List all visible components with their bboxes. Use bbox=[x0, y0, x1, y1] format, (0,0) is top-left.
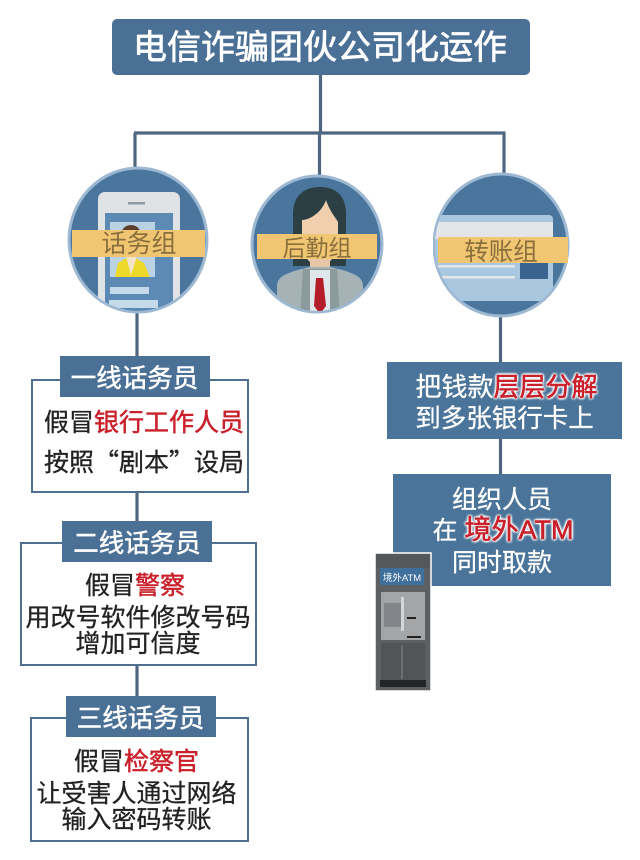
panel: 组织人员: 在 境外ATM bbox=[433, 515, 573, 545]
text: 二线话务员 description bbox=[25, 572, 250, 658]
icon: 后勤组 woman circle bbox=[250, 174, 384, 314]
icon: ATM machine bbox=[376, 552, 432, 690]
panel: 组织人员 bbox=[393, 474, 611, 586]
panel: 二线话务员 bbox=[20, 542, 257, 666]
icon: 转账组 bank card circle: 转账组 bbox=[464, 238, 538, 266]
label: 二线话务员 bbox=[62, 521, 212, 562]
text: 三线话务员 description: 假冒检察官 bbox=[74, 748, 199, 776]
text: 一线话务员 description bbox=[44, 408, 244, 478]
icon: ATM machine: 境外ATM bbox=[383, 572, 421, 584]
panel: 把钱款层层分解 bbox=[387, 362, 622, 439]
label: 二线话务员: 二线话务员 bbox=[73, 530, 201, 558]
icon: 话务组 phone circle: 话务组 bbox=[101, 230, 177, 258]
label: 三线话务员: 三线话务员 bbox=[77, 705, 204, 733]
panel: 一线话务员 bbox=[31, 379, 249, 493]
panel: 组织人员: 组织人员 bbox=[452, 486, 552, 514]
text: 三线话务员 description bbox=[36, 748, 236, 834]
text: 二线话务员 description: 假冒警察 bbox=[85, 572, 185, 600]
label: 一线话务员: 一线话务员 bbox=[71, 365, 198, 393]
text: 二线话务员 description: 用改号软件修改号码 bbox=[25, 604, 250, 632]
panel: 组织人员: 同时取款 bbox=[452, 549, 552, 577]
text: 二线话务员 description: 增加可信度 bbox=[75, 630, 200, 658]
panel: 三线话务员 bbox=[30, 717, 249, 842]
text: 一线话务员 description: 假冒银行工作人员 bbox=[44, 408, 244, 436]
title: 电信诈骗团伙公司化运作 bbox=[133, 29, 507, 67]
title bbox=[112, 19, 530, 75]
icon: 转账组 bank card circle bbox=[433, 172, 570, 318]
panel: 把钱款层层分解: 把钱款层层分解 bbox=[415, 372, 598, 402]
icon: 话务组 phone circle bbox=[68, 166, 208, 314]
icon: 后勤组 woman circle: 后勤组 bbox=[282, 235, 352, 261]
label: 一线话务员 bbox=[60, 356, 210, 397]
text: 一线话务员 description: 按照“剧本”设局 bbox=[44, 442, 244, 478]
panel: 把钱款层层分解: 到多张银行卡上 bbox=[415, 405, 594, 433]
text: 三线话务员 description: 让受害人通过网络 bbox=[36, 780, 236, 808]
text: 三线话务员 description: 输入密码转账 bbox=[61, 806, 212, 834]
label: 三线话务员 bbox=[66, 696, 216, 737]
